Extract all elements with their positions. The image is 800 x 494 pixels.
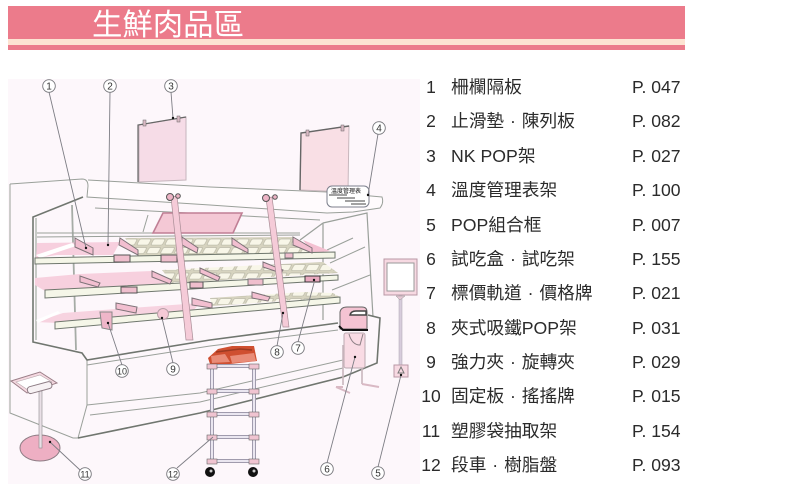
- parts list: 6: [426, 249, 436, 269]
- top shelf with pink backing: [35, 213, 335, 264]
- parts list: P. 031: [632, 318, 681, 338]
- POP poster left: [138, 116, 186, 182]
- parts list: P. 007: [632, 215, 681, 235]
- callout numbers: 5: [375, 468, 381, 480]
- parts list: P. 093: [632, 455, 681, 475]
- title: 生鮮肉品區: [92, 0, 244, 44]
- temperature control label holder: [327, 186, 369, 207]
- callout numbers: 10: [117, 366, 127, 376]
- parts list: P. 100: [632, 180, 681, 200]
- parts list: 2: [426, 111, 436, 131]
- parts list: 8: [426, 318, 436, 338]
- callout numbers: 2: [107, 82, 113, 92]
- parts list: P. 029: [632, 352, 681, 372]
- callout numbers: 7: [295, 344, 301, 354]
- parts list: 溫度管理表架: [451, 180, 557, 200]
- magnetic POP pole 1: [166, 194, 193, 340]
- parts list: P. 027: [632, 146, 681, 166]
- parts list: 段車 樹脂盤: [451, 455, 557, 475]
- parts list: 11: [422, 421, 440, 441]
- parts list: ·: [528, 283, 534, 303]
- leader lines: [49, 92, 402, 470]
- parts list: 10: [421, 386, 441, 406]
- parts list: ·: [510, 386, 516, 406]
- parts list: P. 021: [632, 283, 681, 303]
- callout numbers: 3: [168, 82, 174, 92]
- parts list: ·: [510, 111, 516, 131]
- parts list: ·: [492, 455, 498, 475]
- parts list: [421, 77, 681, 475]
- parts list: ·: [510, 249, 516, 269]
- parts list: ·: [510, 352, 516, 372]
- middle shelf: [35, 262, 338, 298]
- POP poster right: [300, 125, 349, 192]
- bottom shelf: [36, 292, 340, 329]
- parts list: POP組合框: [451, 215, 541, 235]
- hinged clip: [158, 308, 168, 320]
- parts list: 夾式吸鐵POP架: [451, 318, 577, 338]
- cream header stripe: [8, 39, 685, 45]
- magnetic POP pole 2: [262, 194, 289, 327]
- parts list: 試吃盒 試吃架: [451, 249, 575, 269]
- callout numbers: 11: [80, 470, 90, 480]
- parts list: 柵欄隔板: [451, 77, 522, 97]
- step cart: [205, 364, 259, 477]
- callout numbers: 8: [274, 348, 280, 358]
- parts list: 4: [426, 180, 436, 200]
- parts list: 3: [426, 146, 436, 166]
- callout numbers: 12: [168, 470, 178, 480]
- callout numbers: 9: [170, 364, 176, 376]
- callout numbers: 4: [376, 124, 382, 134]
- parts list: 固定板 搖搖牌: [451, 386, 575, 406]
- plastic bag stand: [11, 372, 60, 461]
- illustration: refrigerated meat display case: [10, 79, 418, 481]
- callout numbers: [43, 80, 385, 480]
- parts list: P. 047: [632, 77, 681, 97]
- parts list: P. 015: [632, 386, 681, 406]
- parts list: 12: [421, 455, 441, 475]
- parts list: 標價軌道 價格牌: [451, 283, 593, 303]
- parts list: 塑膠袋抽取架: [451, 421, 557, 441]
- temperature control label holder: 溫度管理表: [331, 187, 361, 195]
- parts list: P. 155: [632, 249, 681, 269]
- parts list: 9: [426, 352, 436, 372]
- fixing plate: [100, 312, 112, 330]
- header banner: [8, 6, 685, 50]
- meat on cart: [208, 346, 257, 364]
- POP frame on pole: [384, 259, 417, 377]
- parts list: 強力夾 旋轉夾: [451, 352, 575, 372]
- callout numbers: 1: [46, 82, 52, 92]
- illustration background: [8, 79, 420, 484]
- parts list: 5: [426, 215, 436, 235]
- parts list: P. 082: [632, 111, 681, 131]
- parts list: 止滑墊 陳列板: [451, 111, 575, 131]
- parts list: NK POP架: [451, 146, 536, 166]
- display case body: [10, 179, 383, 438]
- parts list: 7: [426, 283, 436, 303]
- parts list: 1: [426, 77, 436, 97]
- sample dispenser: [336, 307, 379, 393]
- callout numbers: 6: [324, 464, 330, 476]
- parts list: P. 154: [632, 421, 681, 441]
